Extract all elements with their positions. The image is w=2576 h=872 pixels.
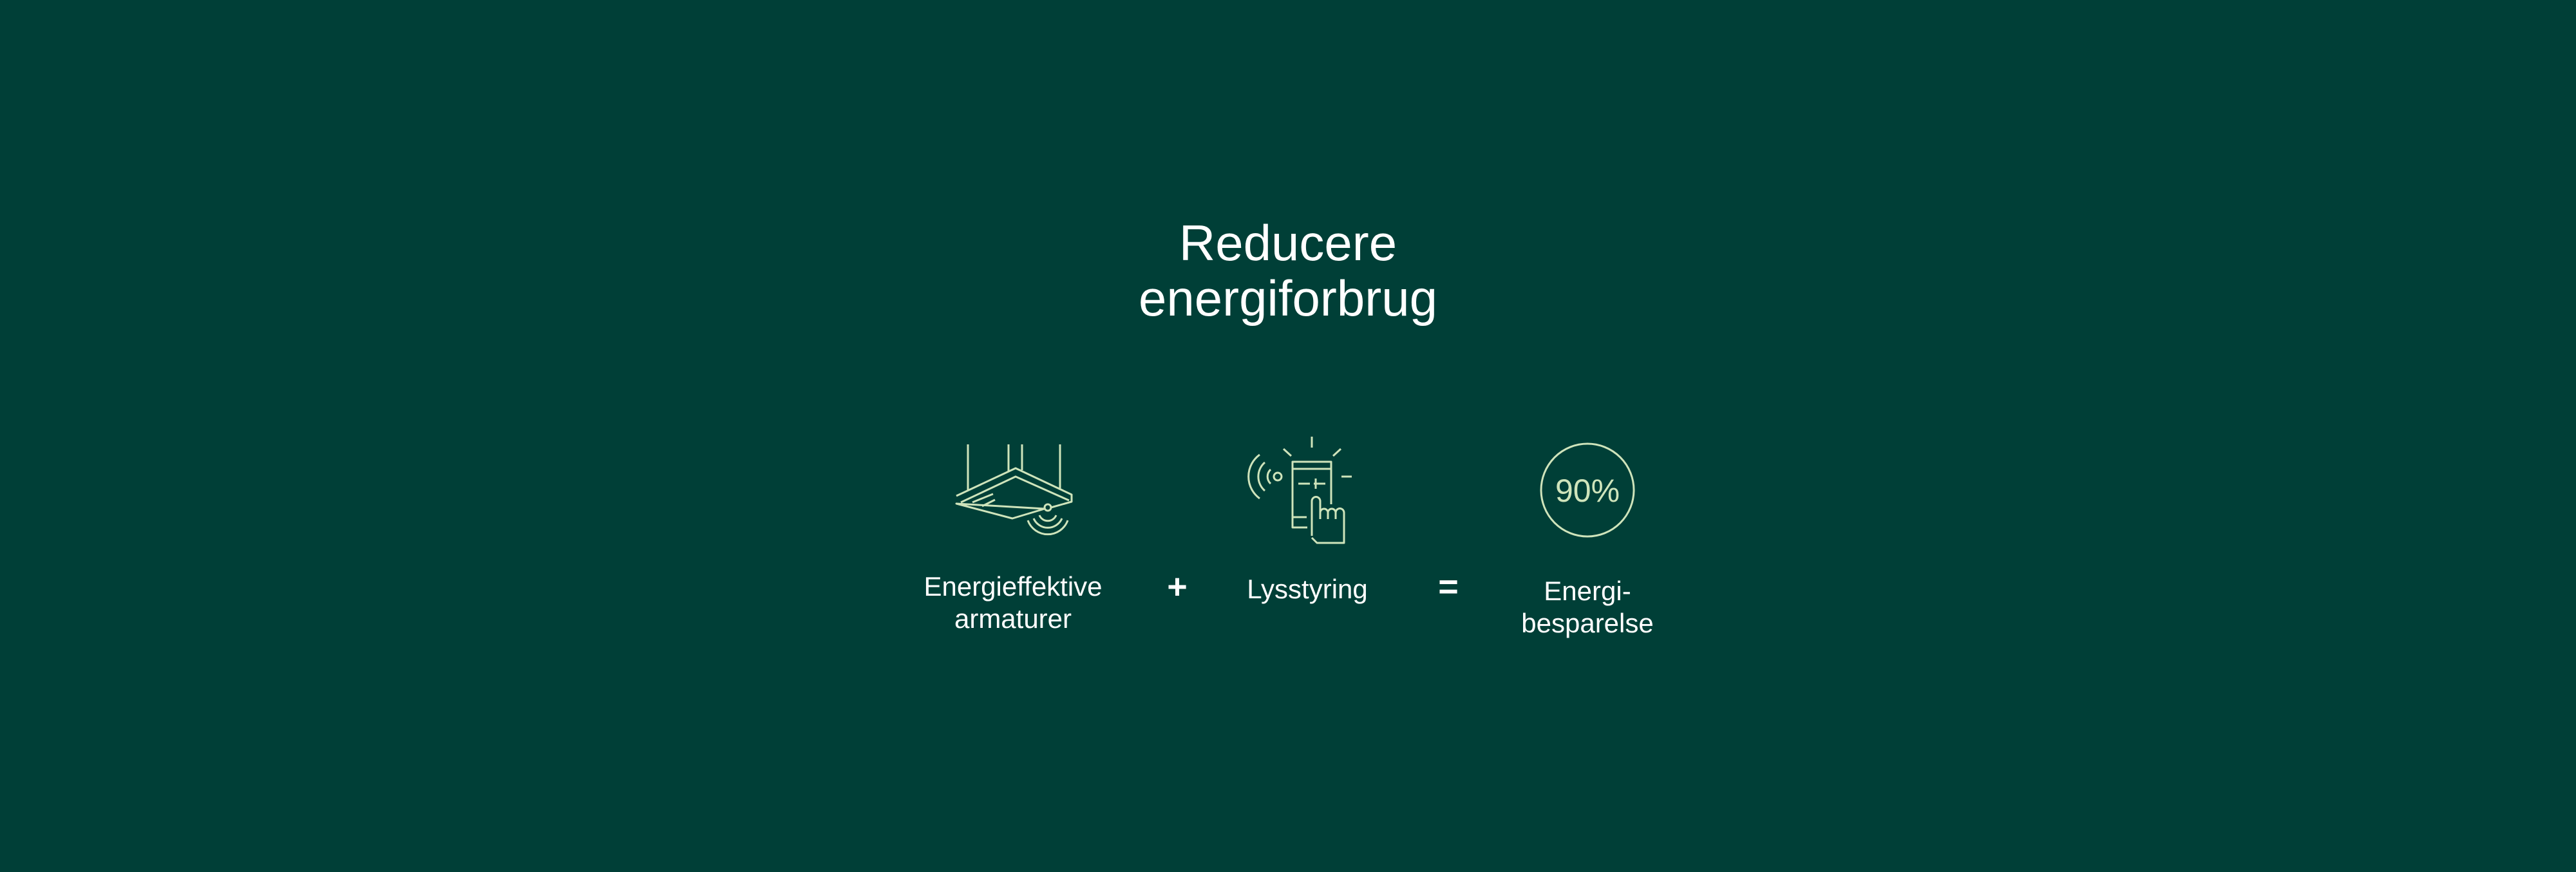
icon: 90% circle — [1540, 443, 1634, 537]
icon: light control — [1247, 437, 1352, 544]
label: fixtures — [923, 571, 1103, 634]
title — [1139, 214, 1437, 327]
icon: energy efficient fixture — [956, 444, 1073, 536]
label: energy savings: besparelse — [1521, 608, 1654, 638]
plus sign: + — [1167, 567, 1188, 606]
label: energy savings — [1521, 576, 1654, 638]
title: Reducere — [1179, 214, 1397, 271]
equals sign: = — [1438, 567, 1459, 606]
label: fixtures: armaturer — [954, 603, 1072, 634]
icon: 90% circle: 90% — [1555, 473, 1620, 509]
label: energy savings: Energi- — [1544, 576, 1631, 606]
title: energiforbrug — [1139, 270, 1437, 327]
label: light control: Lysstyring — [1247, 574, 1368, 604]
label: fixtures: Energieffektive — [923, 571, 1103, 602]
